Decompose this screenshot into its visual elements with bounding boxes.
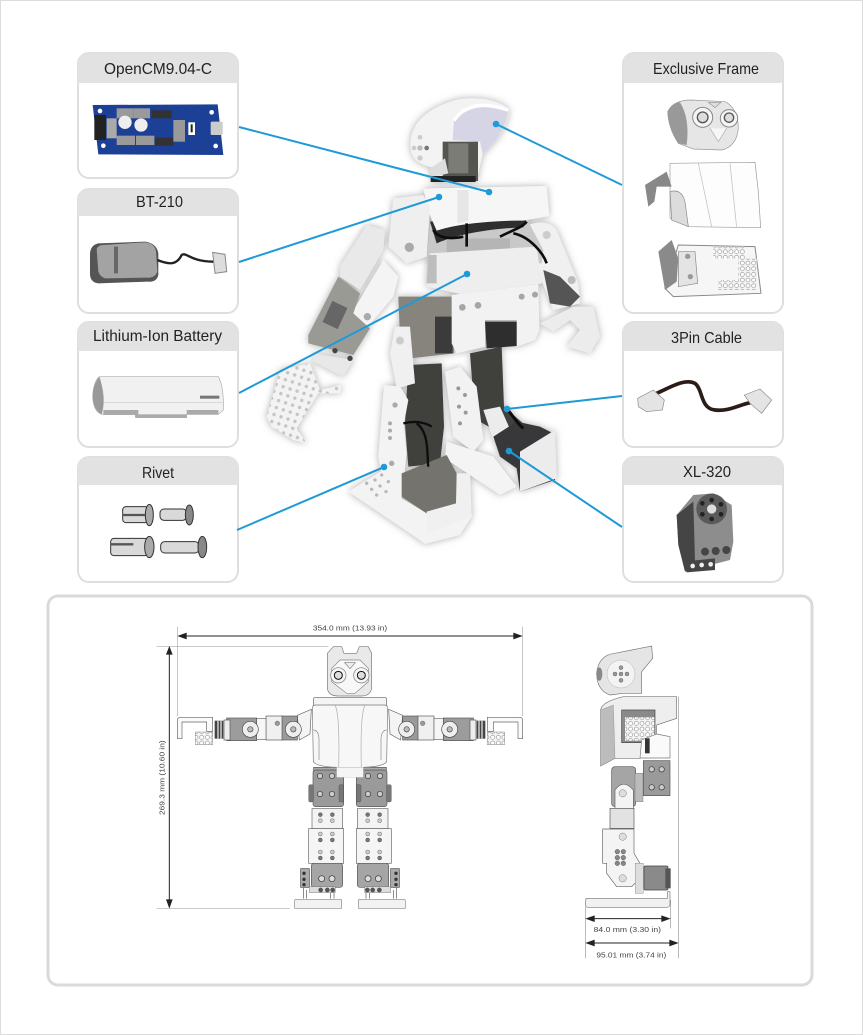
robot arm left [177,709,311,745]
image: servo [677,493,733,572]
panel: Lithium-Ion Battery [78,322,238,447]
robot leg right [356,767,405,908]
panel: 3Pin Cable [623,322,783,447]
card header [623,457,783,485]
robot torso [312,697,388,777]
robot leg left [295,767,344,908]
image: head frame [668,100,738,150]
side robot head [596,646,653,695]
robot hip servo [398,297,454,358]
robot torso interior [427,218,543,263]
card title: OpenCM9.04-C [104,61,212,78]
robot lower dark servos [405,347,527,467]
panel: XL-320 [623,457,783,582]
extension lines [585,697,678,958]
panel: BT-210 [78,189,238,313]
panel: robot photo [267,98,600,544]
card header [623,53,783,83]
robot left foot [348,467,472,544]
95.01 mm arrow [585,940,679,946]
width arrow [177,633,523,639]
panel: Rivet [78,457,238,582]
front view drawing [157,623,523,909]
leader: BT-210 [239,194,442,262]
robot battery block [427,247,542,294]
leader: OpenCM9.04-C [239,127,492,195]
card header [623,322,783,351]
card title: 3Pin Cable [671,330,742,347]
robot right leg [445,367,557,495]
robot left leg [378,327,415,483]
robot left arm [267,195,430,443]
card title: Exclusive Frame [653,61,759,78]
robot head [410,98,509,182]
extension lines [157,627,523,908]
card header [78,457,238,485]
card header [78,322,238,351]
image: rivets [111,504,207,558]
card title: XL-320 [683,464,731,481]
width label: 354.0 mm (13.93 in) [313,623,388,632]
leader: exclusive frame [493,121,622,185]
robot base plate [452,284,539,353]
leader: XL-320 [506,448,622,527]
card title: Rivet [142,465,174,482]
robot chest [423,186,549,231]
robot head [327,647,372,696]
robot left foot servo [402,455,457,513]
leader: 3Pin cable [504,396,622,412]
image: battery [93,377,223,418]
side robot torso [601,697,677,796]
84.0 mm arrow [585,915,671,922]
leader: battery [239,271,470,393]
95.01 mm label: 95.01 mm (3.74 in) [596,950,666,959]
image: circuit board [93,104,223,155]
card title: BT-210 [136,194,183,211]
image: chest frame [645,162,761,228]
image: base frame [658,240,761,297]
card title: Lithium-Ion Battery [93,328,222,345]
side view drawing [585,646,679,959]
card header [78,53,238,83]
image: cable [638,382,772,413]
robot arm right [389,709,523,745]
image: bluetooth module [90,242,227,283]
card header [78,189,238,216]
leader: rivet [237,464,387,530]
panel: Exclusive Frame [623,53,783,313]
side robot leg [585,767,671,907]
84.0 mm label: 84.0 mm (3.30 in) [594,925,661,934]
robot right arm [520,222,600,353]
panel: OpenCM9.04-C [78,53,238,178]
height arrow [166,646,173,909]
leader lines [237,121,622,530]
panel: dimensions [48,596,812,985]
height label: 269.3 mm (10.60 in) [158,740,167,815]
